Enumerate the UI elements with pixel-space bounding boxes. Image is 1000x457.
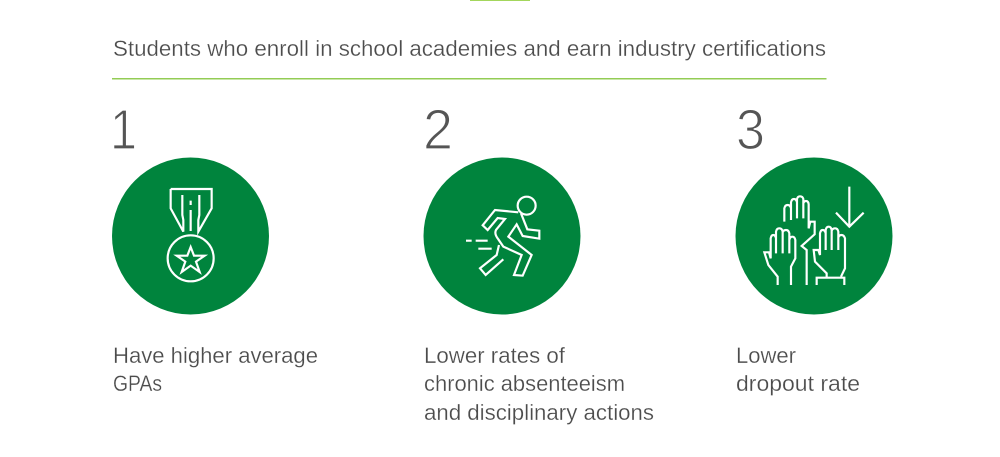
heading: Students who enroll in school academies and earn industry certifications — [113, 36, 826, 61]
icon: raised hands and down arrow — [736, 158, 892, 314]
description: higher GPAs: Have higher average — [113, 343, 318, 368]
description: lower dropout: Lower — [736, 343, 796, 368]
description: lower absenteeism: and disciplinary actions — [424, 400, 654, 425]
top accent bar — [470, 0, 530, 1]
panel: higher GPAs — [110, 98, 318, 396]
description: lower dropout — [736, 343, 860, 396]
icon: medal — [112, 158, 269, 314]
number 3: 3 — [736, 98, 765, 162]
icon: running person — [424, 158, 580, 314]
description: lower absenteeism — [424, 343, 654, 425]
description: higher GPAs: GPAs — [113, 371, 162, 396]
description: lower absenteeism: Lower rates of — [424, 343, 566, 368]
number 2: 2 — [423, 98, 453, 162]
panel: lower dropout — [736, 98, 892, 396]
description: lower absenteeism: chronic absenteeism — [424, 371, 625, 396]
panel: lower absenteeism — [423, 98, 654, 425]
description: lower dropout: dropout rate — [736, 371, 860, 396]
description: higher GPAs — [113, 343, 318, 396]
number 1: 1 — [110, 98, 137, 162]
